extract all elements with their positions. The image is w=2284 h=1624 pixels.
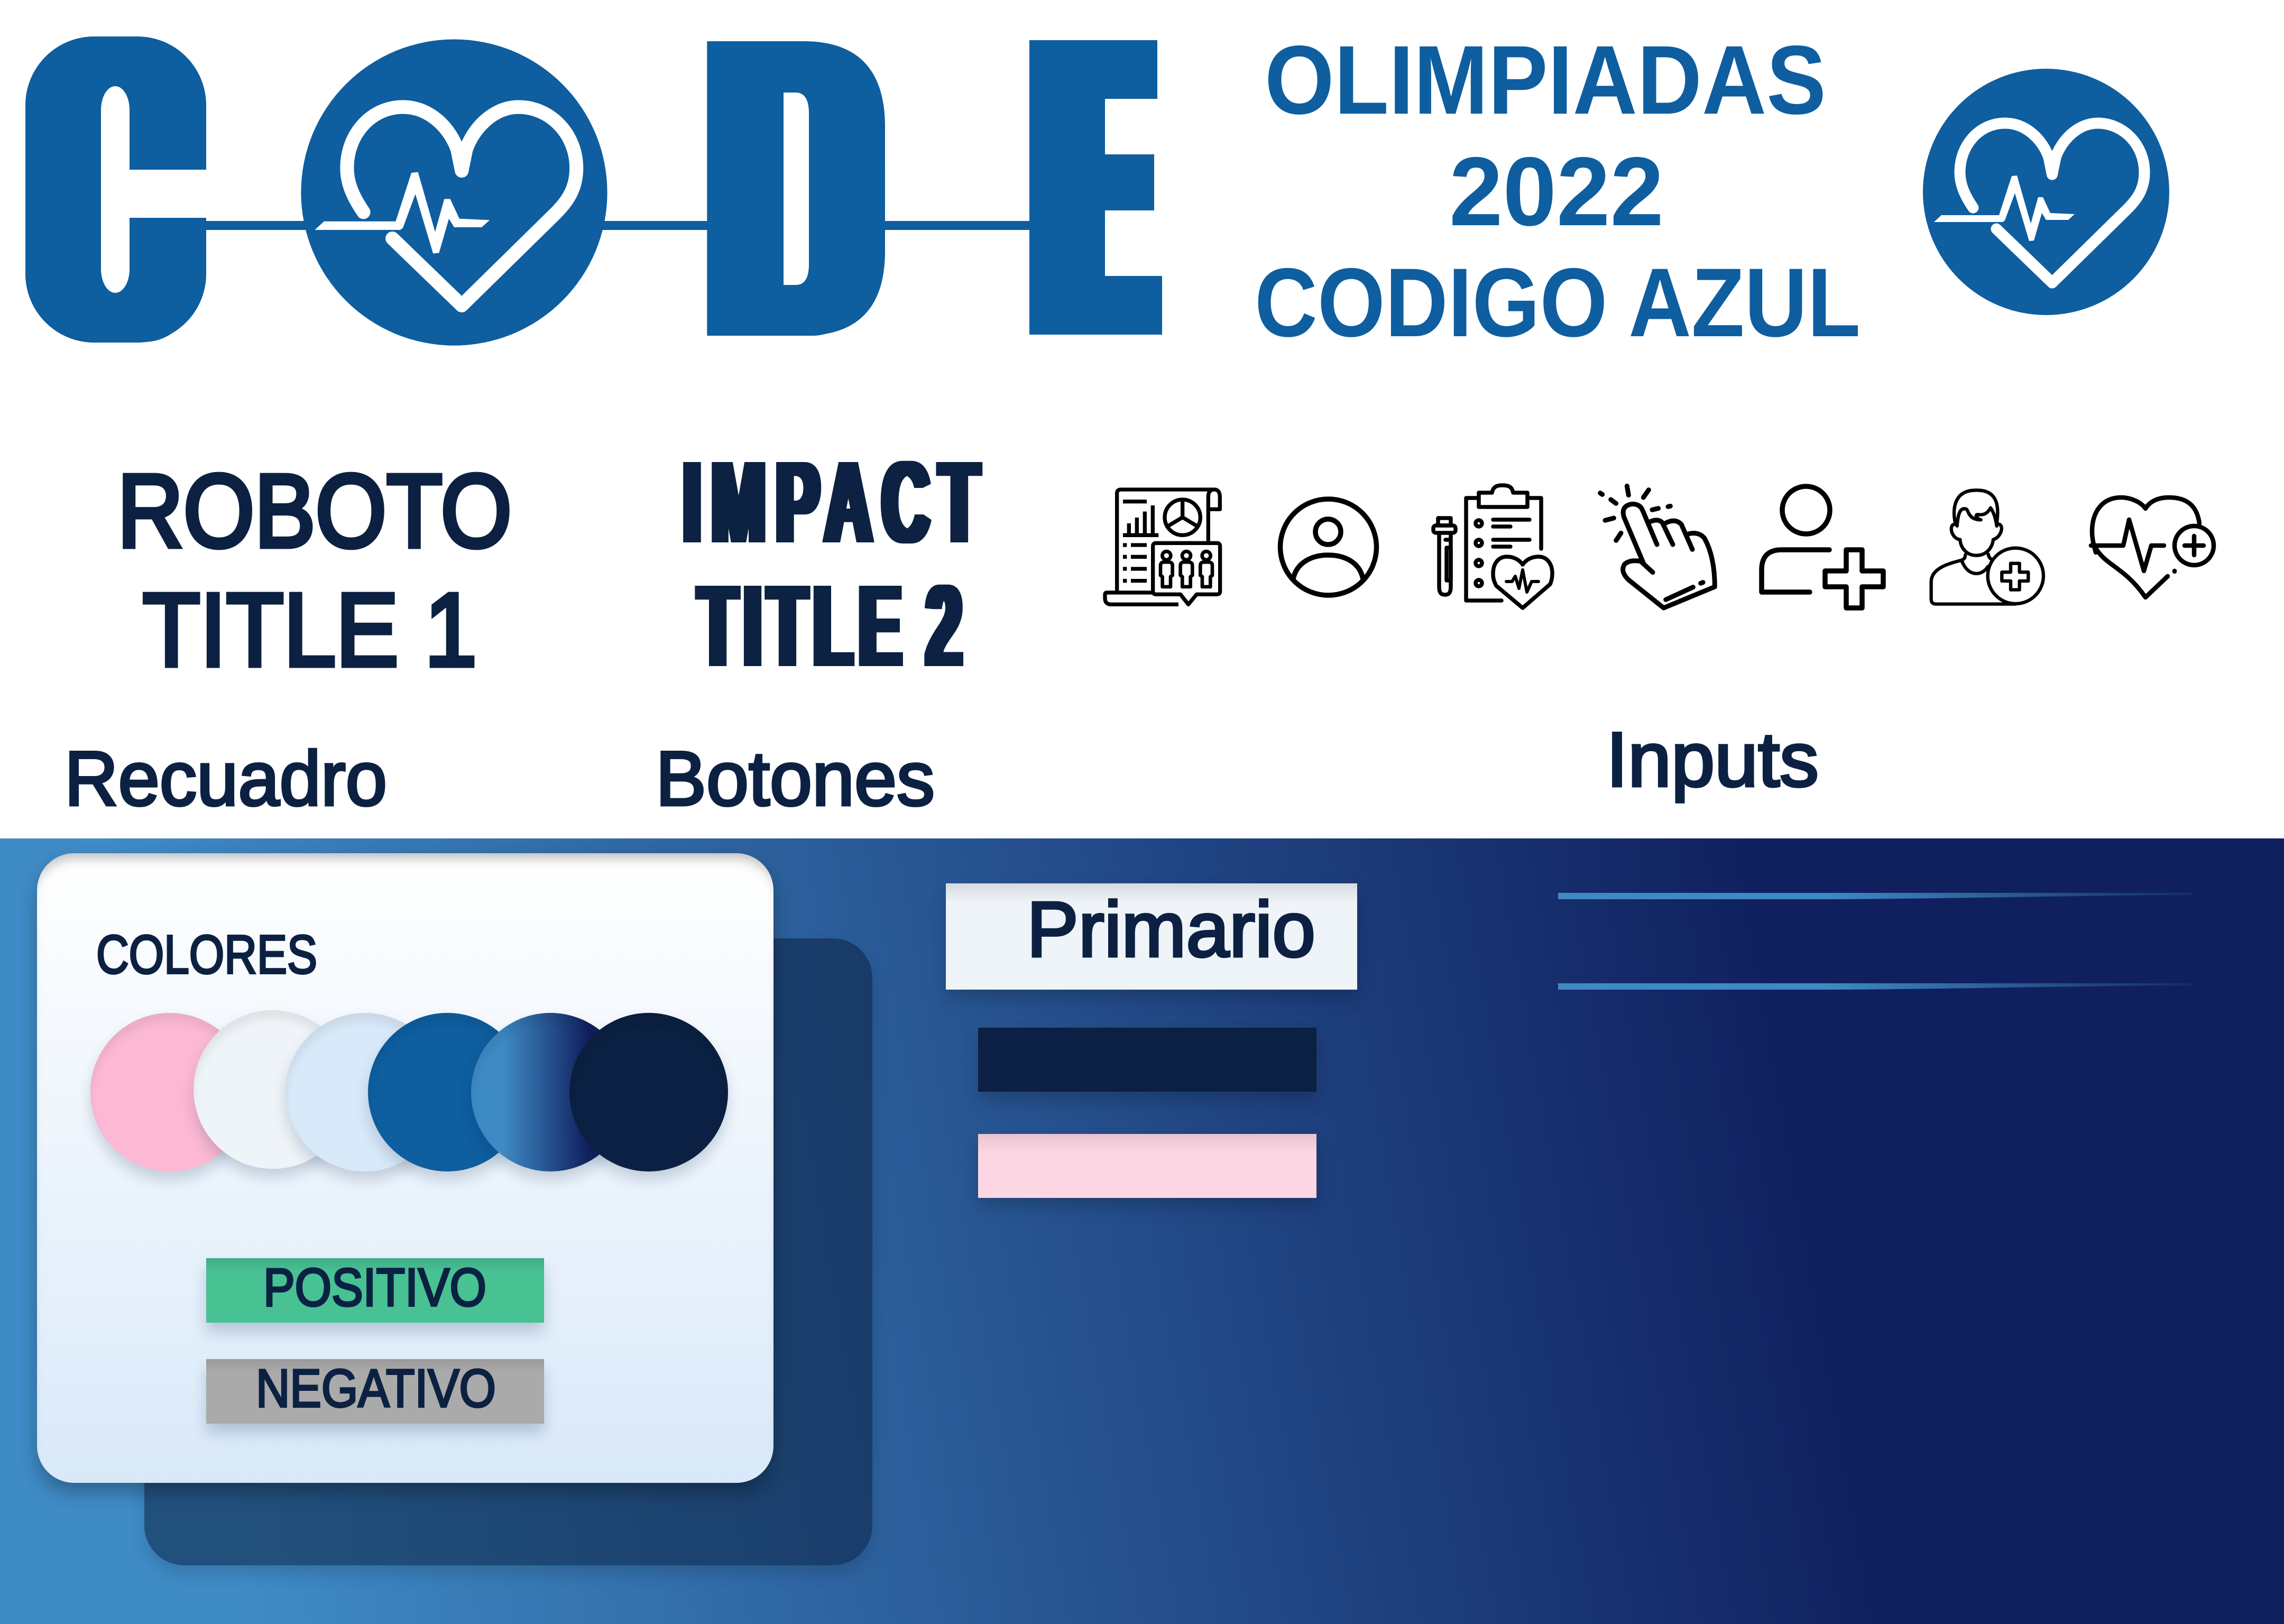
icon: add doctor <box>1931 490 2043 604</box>
panel: gradient background <box>0 838 2284 1624</box>
panel: colour card <box>37 853 773 1483</box>
icon: add user <box>1762 486 1883 608</box>
title: olimpiadas 2022 codigo azul: 2022 <box>1449 137 1664 246</box>
label: inputs: Inputs <box>1606 716 1819 802</box>
heading: roboto title 1 <box>117 453 512 688</box>
button: navy <box>978 1028 1316 1092</box>
button: primario <box>946 883 1357 990</box>
heading: impact title 2: IMPACT <box>683 438 990 567</box>
swatch: white <box>194 1010 352 1169</box>
label: botones: Botones <box>656 735 935 822</box>
label: recuadro: Recuadro <box>65 735 387 822</box>
icon: user profile circle <box>1281 499 1377 595</box>
title: olimpiadas 2022 codigo azul <box>1255 26 1861 357</box>
palette circles <box>85 1010 734 1185</box>
input line 2 <box>1558 983 2192 990</box>
swatch: pink <box>90 1013 249 1171</box>
swatch: blue <box>368 1013 527 1171</box>
button: pink <box>978 1134 1316 1198</box>
panel: back card <box>144 938 872 1565</box>
swatch: light blue <box>286 1013 444 1171</box>
heading: roboto title 1: ROBOTO <box>117 453 512 569</box>
title: olimpiadas 2022 codigo azul: CODIGO AZUL <box>1255 248 1861 357</box>
button: positivo: POSITIVO <box>263 1258 486 1317</box>
title: olimpiadas 2022 codigo azul: OLIMPIADAS <box>1265 26 1826 135</box>
heading: colores: COLORES <box>96 924 317 985</box>
button: primario: Primario <box>1027 886 1315 973</box>
button: positivo <box>206 1258 544 1323</box>
input line 1 <box>1558 893 2192 899</box>
icon: heart in circle inside logo <box>301 39 607 346</box>
swatch: navy <box>569 1013 728 1171</box>
logo: CODE <box>11 0 1162 427</box>
heading: impact title 2 <box>683 438 990 690</box>
icon: report with charts and people <box>1105 490 1220 604</box>
icon: heart in circle <box>1923 69 2169 315</box>
swatch: gradient <box>471 1013 630 1171</box>
icon: clipboard with test tube and heart <box>1433 485 1552 608</box>
icon: add heart <box>2091 497 2214 597</box>
icon: tapping hand <box>1600 486 1715 608</box>
button: negativo: NEGATIVO <box>256 1359 496 1418</box>
heading: impact title 2: TITLE 2 <box>698 562 969 690</box>
heading: roboto title 1: TITLE 1 <box>143 572 477 688</box>
